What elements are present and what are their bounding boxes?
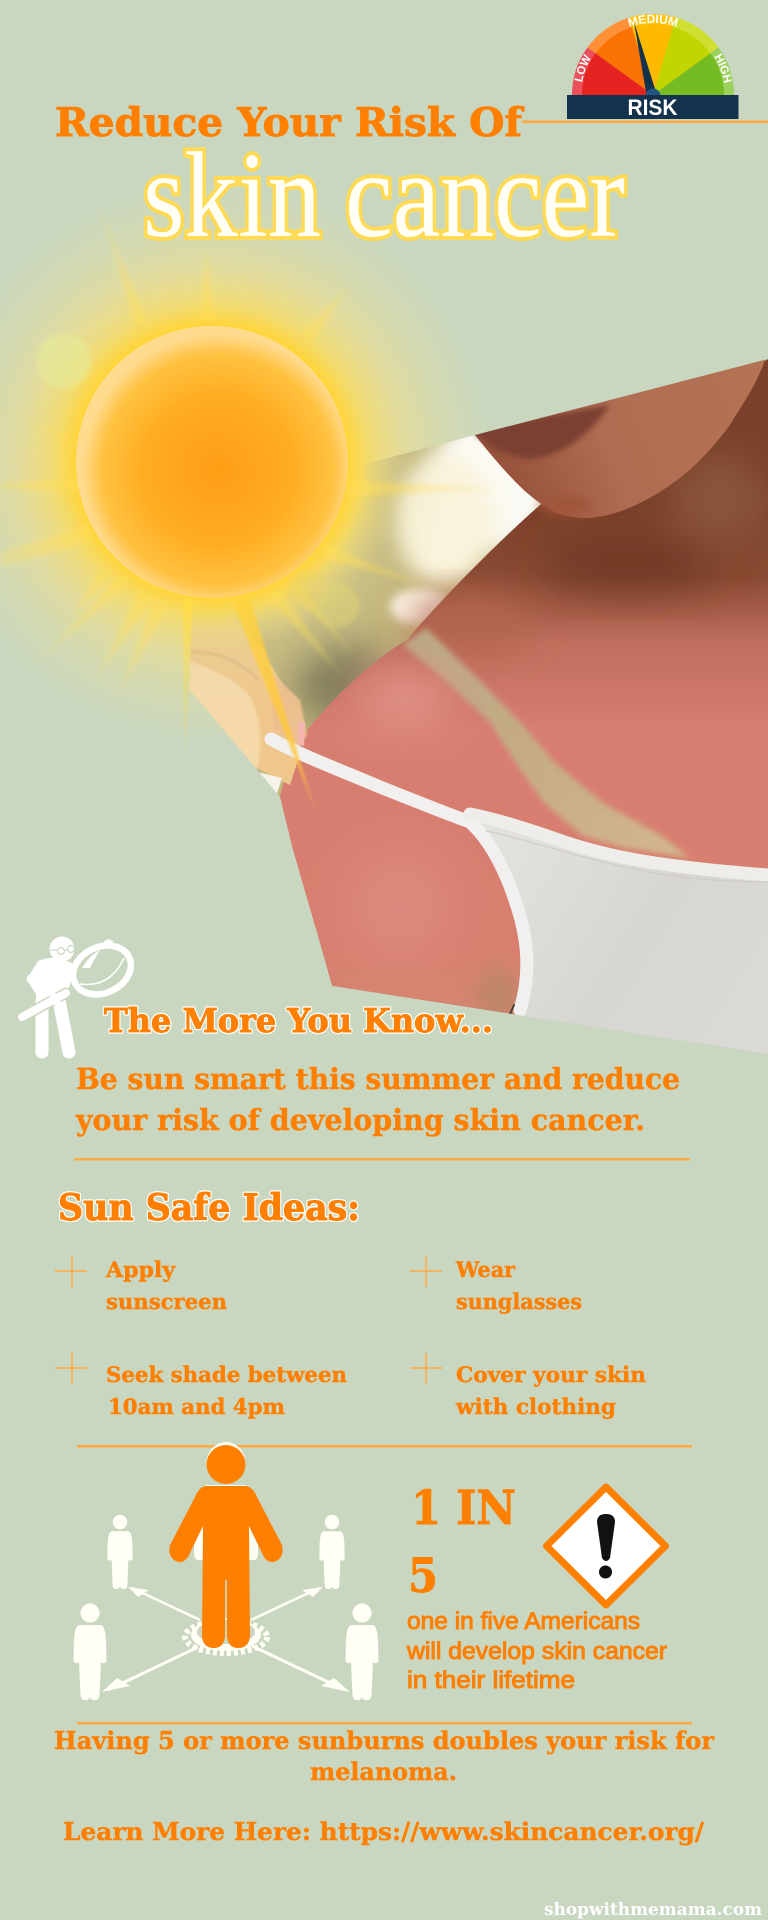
idea: apply sunscreen: Apply <box>105 1257 176 1282</box>
heading: Sun Safe Ideas: Sun Safe Ideas: <box>58 1187 360 1229</box>
learn more link: Learn More Here: https://www.skincancer.org/ <box>63 1817 704 1846</box>
neck and chest skin <box>280 359 768 1054</box>
orange central figure <box>169 1445 283 1648</box>
title: skin cancer: skin <box>143 128 321 263</box>
sun safe ideas list <box>55 1256 646 1419</box>
idea: seek shade: 10am and 4pm <box>108 1394 285 1419</box>
idea: wear sunglasses: Wear <box>455 1257 516 1282</box>
idea: seek shade: Seek shade between <box>106 1362 347 1387</box>
title line from heading to edge <box>522 120 768 123</box>
risk gauge icon: HIGH <box>714 54 732 83</box>
idea: cover skin with clothing: Cover your skin <box>456 1362 646 1387</box>
title: skin cancer: skin <box>143 128 321 263</box>
divider <box>77 1722 692 1724</box>
tank top binding and strap <box>271 739 768 1014</box>
chin <box>475 360 765 518</box>
sun with rays <box>0 190 515 815</box>
shoulder highlight <box>357 668 453 732</box>
idea: apply sunscreen: sunscreen <box>106 1289 227 1314</box>
title: skin cancer <box>143 128 625 263</box>
statistic description: one in five Americans <box>407 1608 640 1635</box>
hand holding strap <box>190 620 308 794</box>
person top right <box>319 1515 345 1589</box>
idea: apply sunscreen <box>55 1256 227 1314</box>
tan line strip <box>403 628 690 858</box>
risk gauge icon: RISK <box>628 95 678 120</box>
white tank top fabric <box>474 815 768 1054</box>
idea: wear sunglasses <box>410 1256 582 1314</box>
gauge base <box>567 95 738 119</box>
risk gauge icon: MEDIUM <box>628 14 678 27</box>
people statistic illustration <box>74 1442 378 1700</box>
arrows <box>102 1587 350 1692</box>
idea: seek shade <box>55 1353 347 1419</box>
idea: cover skin with clothing <box>410 1353 646 1419</box>
idea: wear sunglasses: sunglasses <box>456 1289 582 1314</box>
melanoma statement: Having 5 or more sunburns doubles your risk for <box>54 1726 714 1755</box>
person bottom right <box>346 1604 378 1700</box>
icon: warning diamond <box>546 1487 666 1605</box>
title: Reduce Your Risk Of: Reduce Your Risk Of <box>55 100 524 146</box>
title: skin cancer: cancer <box>345 128 625 263</box>
idea: cover skin with clothing: with clothing <box>455 1394 616 1419</box>
person top left <box>107 1515 133 1589</box>
icon: person with magnifying glass <box>22 936 139 1052</box>
risk gauge icon <box>567 14 738 120</box>
photo background bokeh <box>235 359 768 850</box>
statistic: 1 IN 5: 5 <box>408 1549 438 1604</box>
statistic description: will develop skin cancer <box>406 1638 667 1665</box>
sun glow <box>0 177 497 747</box>
heading: The More You Know: The More You Know... <box>104 1001 493 1040</box>
white figure behind <box>194 1442 258 1560</box>
site credit: shopwithmemama.com <box>544 1900 762 1920</box>
intro text: Be sun smart this summer and reduce <box>76 1062 680 1096</box>
title: skin cancer: cancer <box>345 128 625 263</box>
divider <box>77 1445 692 1448</box>
gauge needle <box>634 22 656 92</box>
statistic: 1 IN 5: 1 IN <box>411 1481 516 1536</box>
heading: The More You Know: The More You Know... <box>104 1001 493 1040</box>
photo: sunburned shoulder with tan line <box>180 340 768 1054</box>
long downward rays <box>232 600 317 815</box>
gear under central figure <box>185 1619 267 1653</box>
statistic description: in their lifetime <box>407 1667 575 1694</box>
person bottom left <box>74 1604 106 1700</box>
divider <box>74 1158 690 1160</box>
sun disc <box>76 326 348 598</box>
gauge segments <box>572 47 653 95</box>
lens flare spots <box>37 334 91 388</box>
intro text: your risk of developing skin cancer. <box>75 1103 645 1137</box>
heading: Sun Safe Ideas: Sun Safe Ideas: <box>58 1187 360 1229</box>
sun rays <box>0 190 515 700</box>
melanoma statement: melanoma. <box>310 1757 457 1786</box>
gauge labels: LOW <box>574 54 590 82</box>
